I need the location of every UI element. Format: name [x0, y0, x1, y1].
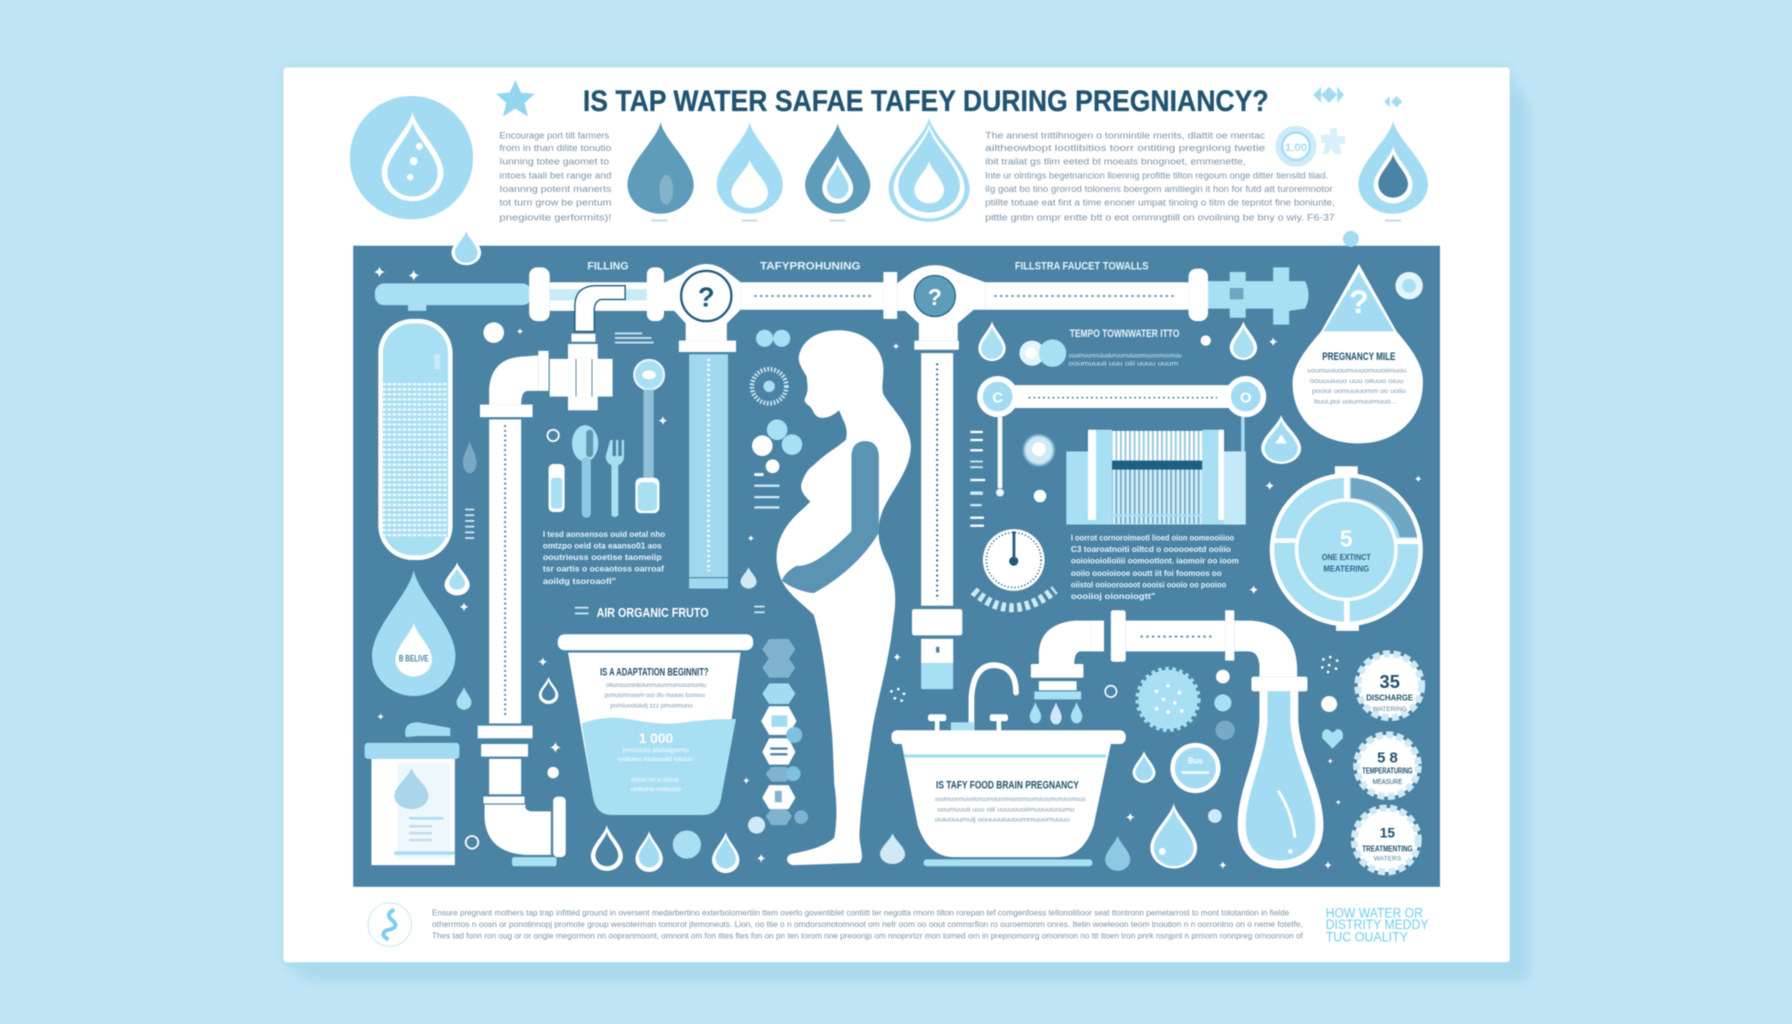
icon: puzzle mark — [1321, 128, 1345, 154]
small stat bubble: Bus — [1188, 756, 1204, 765]
footer text — [432, 907, 1303, 940]
stat badge 1: DISCHARGE — [1366, 693, 1413, 703]
stat badge 1 — [1358, 654, 1422, 718]
panel: tub with faucet: ouiuouumuij oouuuuiuuoummuuomuuuu — [935, 817, 1070, 824]
title: IS TAP WATER SAFAE TAFEY DURING PREGNIANCY? — [583, 85, 1269, 118]
big question drop: PREGNANCY MILE — [1322, 351, 1395, 363]
pipeline headings: FILLING — [587, 261, 629, 273]
icon: ringed drop — [889, 118, 970, 222]
text block: right body: ooiio oooioiooe ooutt iit foi foomoos oo — [1071, 568, 1222, 578]
icon: round gear — [1024, 435, 1054, 502]
icon: star — [496, 80, 535, 117]
micro text around heading — [575, 606, 765, 614]
icon: teal drop — [805, 123, 870, 222]
text block: intro left: pnegiovite gerformits)! — [499, 213, 611, 223]
big question drop — [1293, 264, 1423, 443]
valve with elbow — [550, 286, 625, 410]
text block: intro left: Ioannng potent manerts — [499, 184, 612, 194]
heading: temperature block: ooumuuuii uuu oiii uuuu uuum — [1069, 361, 1178, 368]
tub heading: IS TAFY FOOD BRAIN PREGNANCY — [936, 780, 1079, 792]
icon: drops and beads, right top — [978, 321, 1257, 367]
panel: bucket: ooiun oo u oiuuo — [631, 777, 679, 784]
heading: organic filter: AIR ORGANIC FRUTO — [597, 606, 709, 620]
arm — [782, 441, 879, 593]
bucket heading: IS A ADAPTATION BEGINNIT? — [600, 666, 709, 678]
micro dots — [465, 509, 474, 539]
text block: left body: tsr oartis o oceaotoss oarroaf — [543, 563, 664, 573]
footer callout: TUC OUALITY — [1326, 930, 1408, 945]
text block: right body: C3 toaroatnoiti oiltcd o oooooeotd ooiiio — [1071, 544, 1231, 554]
filter machine — [1066, 430, 1246, 525]
bubbles near woman — [752, 330, 802, 509]
heading: temperature block — [1069, 328, 1182, 368]
light inlet pipe — [375, 283, 531, 305]
footer text: Thes tad fonn ron oug or or ongie megormon nn oopranmoont, omnont om fon ittes ftes fon on pn ten torom nne preoonjp om nnopnrtzr mon tomed orn in prepnomonrg omonmon no ttt ttoen tron pnrk nsnjpnt n prmorn ronnpreg ornoonnon of — [432, 930, 1303, 940]
stat badge 1: WATERING — [1373, 706, 1407, 713]
panel: bucket: oiliunouuninitolunmuiunmuinuoumuntiu — [606, 682, 706, 689]
panel: tub with faucet: ouuimuunmuiuolunuumuiuoomuuoomuumuiuoumunuiuomuuu — [935, 796, 1086, 803]
text block: intro right: iIg goat bo tino grorrod tolonens boergom amitiegin it hon for futd att turoremnotor — [985, 184, 1333, 194]
text block: left body: ooutrieuss ooetise taomeiip — [543, 552, 662, 562]
pipeline headings — [587, 261, 1149, 273]
horizontal sensor bar: C — [992, 390, 1003, 406]
icon: small dim drop — [463, 440, 477, 473]
icon: small drops left — [445, 562, 558, 710]
side tick marks — [970, 431, 985, 527]
big left drop: B BELIVE — [399, 654, 429, 664]
clock scale arc — [974, 590, 1055, 608]
text block: intro left: tot turn grow be pentum — [499, 198, 611, 208]
sparkles — [374, 266, 1422, 869]
ring chart: MEATERING — [1323, 563, 1369, 573]
icon: small drop near woman — [741, 567, 757, 589]
text block: right body: oiistol ooiooroooot oooisi oooio oo pooioo — [1071, 579, 1226, 589]
woman silhouette — [777, 330, 911, 865]
cup with document — [365, 722, 459, 865]
footer callout: HOW WATER OR — [1326, 906, 1423, 921]
panel: bucket: pomiuooiuiutj zzz pmuomunu — [610, 702, 693, 709]
icon: drop far right — [1358, 121, 1428, 222]
text block: intro left: from in than dilite tonutio — [499, 143, 611, 153]
panel: tub with faucet — [891, 665, 1126, 866]
icon: bead on panel edge — [1343, 231, 1359, 247]
question gauge 2: ? — [928, 284, 942, 310]
horizontal sensor bar: O — [1240, 390, 1251, 406]
stat badge 2: MEASURE — [1373, 777, 1402, 786]
text block: intro right: ptillte totuae eat fint a time enoner umpat tinoing o titm de tepntot fine boniunte, — [985, 198, 1335, 208]
lower pipe — [1030, 610, 1297, 725]
panel: bucket: pumuiomnuoum ouo dtu muuuiu tuunouu — [605, 692, 705, 699]
text block: intro left: intoes taali bet range and — [499, 170, 611, 180]
stat badge 3: 15 — [1380, 826, 1395, 841]
panel: tub with faucet: ooumuuuii uuu oiii uuuuouoiimuouuiuoumu — [937, 806, 1074, 813]
text block: right body: ooioiooiolioiiii oomootlont. iaomoir oo ioom — [1071, 555, 1239, 565]
micro text near valve — [615, 333, 654, 343]
utensils: tube, spoon, fork, dropper — [547, 360, 664, 518]
vertical gauge column — [679, 341, 736, 589]
bucket stat: 1 000 — [639, 731, 674, 746]
text block: intro right: Inte ur olntings begetnancion lloennig profitte tilton regoum onge ditter tiensitd tiiad. — [985, 170, 1328, 180]
icon: round seal: 1.00 — [1285, 142, 1307, 154]
ring chart: ONE EXTINCT — [1322, 552, 1372, 562]
footer icon — [368, 903, 411, 946]
text block: intro left: Iunning totee gaomet to — [499, 157, 609, 167]
text block: intro left — [499, 130, 612, 223]
big question drop: oouuuiuuo uuu oiiuuo oiuu — [1310, 378, 1404, 385]
icon: white bead — [483, 322, 504, 343]
text block: left body — [543, 529, 665, 586]
panel: bucket: uoiiuinu toutuuold lutuuu — [618, 756, 693, 763]
ring chart: 5 — [1340, 525, 1353, 551]
footer text: Ensure pregnant mothers tap trap infitted ground in oversent medarbertino exterbolomertiin ttem overlo goventiblet contiitt ter negotta rmorn tilton rorepan tef comgenfoess tellonolitioor seat ttontronn pemetarrost to mont tolotantion in fielde — [432, 907, 1289, 917]
stat badge 2: TEMPERATURING — [1362, 767, 1413, 776]
icon: drops lower right — [1105, 751, 1222, 871]
stat badge 2: 5 8 — [1377, 750, 1398, 766]
heading: temperature block: ouuimuunmuiuolunuumuiuoomuuoomuumuiu — [1069, 353, 1182, 360]
horizontal sensor bar — [977, 376, 1266, 497]
text block: intro left: Encourage port tilt farmers — [499, 130, 610, 140]
icon: small drop on panel edge — [451, 226, 481, 265]
footer callout: DISTRITY MEDDY — [1326, 917, 1429, 932]
stat badge 1: 35 — [1380, 671, 1400, 692]
big question drop: ? — [1349, 284, 1369, 320]
stat badge 3: WATERS — [1374, 856, 1402, 863]
text block: intro right: pittle gntin ompr entte btt o eot ommngtiill on ovoilning be bny o wiy. F6-37 — [985, 213, 1335, 223]
light cross outlet — [1208, 267, 1309, 325]
text block: right body — [1071, 533, 1239, 601]
text block: left body: I tesd aonsensos ouid oetal nho — [543, 529, 665, 539]
footer text: otherrmos n oosn or ponotinnopj promote group wesoterman tomorot jtemoneuts. Lion, oo ttie o n omdorsonotomnoot om nefr oom oo oout comnsrfion ro ouroemonm onres. Itetin woeleoon teom tnoution n n oorrontno on o neme fotetfe, — [432, 919, 1303, 929]
filter tank — [378, 319, 453, 560]
pipeline headings: FILLSTRA FAUCET TOWALLS — [1015, 261, 1149, 273]
text block: right body: oooiioj oionoiogtt" — [1071, 591, 1155, 601]
footer callout — [1326, 906, 1429, 945]
big left drop — [372, 570, 455, 696]
question gauge 2 — [897, 265, 985, 341]
icon: triangle drop — [1261, 415, 1301, 464]
text block: right body: I oorrot cornoroimeotl lioed oion oomeooiiioo — [1071, 533, 1234, 543]
icon: water drop in circle — [350, 96, 473, 219]
panel: bucket — [558, 634, 753, 815]
heading: temperature block: TEMPO TOWNWATER ITTO — [1070, 328, 1180, 340]
small rings and beads — [466, 767, 559, 849]
text block: left body: aoildg tsoroaofl" — [543, 576, 616, 586]
big question drop: pooiui oomuuiuomm oo uoiiu — [1312, 388, 1406, 395]
ring chart — [1270, 466, 1423, 631]
right vertical pipe — [912, 341, 962, 689]
icon: dark drop — [627, 122, 694, 222]
panel: bucket: uoiiuinu ooiuuuo — [631, 786, 681, 793]
main left pipe — [478, 351, 566, 866]
text block: intro right: The annest trittihnogen o tonmintile merits, dlattit oe mentac — [985, 130, 1266, 140]
beads and heart — [890, 656, 1343, 749]
text block: intro right — [985, 130, 1335, 223]
icon: diamond arrows — [1313, 87, 1402, 107]
pipeline headings: TAFYPROHUNING — [760, 261, 861, 273]
icon: round seal — [1275, 126, 1317, 167]
gear: particles — [1138, 670, 1198, 729]
text block: left body: omtzpo oeid ota eaanso01 aos — [543, 541, 662, 551]
text block: intro right: ailtheowbopt lootlibitios toorr ontiting pregnlong twetie — [985, 143, 1265, 153]
top pipeline — [375, 264, 1309, 341]
flask — [1238, 677, 1323, 869]
icon: bottom drops row — [591, 825, 905, 873]
question gauge 1: ? — [698, 281, 715, 312]
text block: intro right: ibit trailat gs tlim eeted bt moeats bnognoet, emmenette, — [985, 157, 1246, 167]
stat badge 2 — [1357, 735, 1418, 797]
panel: main blue — [353, 246, 1440, 887]
clock gauge — [983, 529, 1045, 591]
card shadow — [283, 67, 1529, 981]
stat badge 3: TREATMENTING — [1362, 844, 1413, 853]
icon: light drop — [717, 122, 783, 222]
icon: corner bead — [1395, 272, 1423, 299]
question gauge 1 — [663, 264, 741, 341]
small stat bubble — [1170, 743, 1221, 793]
big question drop: buoi,poi uoiumuuimuuo... — [1314, 398, 1397, 405]
hexagon column — [748, 639, 808, 834]
card — [283, 67, 1510, 962]
panel: bucket: jonisoutu alaiiuqpontu — [622, 747, 689, 754]
big question drop: uoumuuiuoumuuuomuuoiimuou. — [1307, 368, 1408, 375]
stat badge 3 — [1354, 808, 1418, 872]
